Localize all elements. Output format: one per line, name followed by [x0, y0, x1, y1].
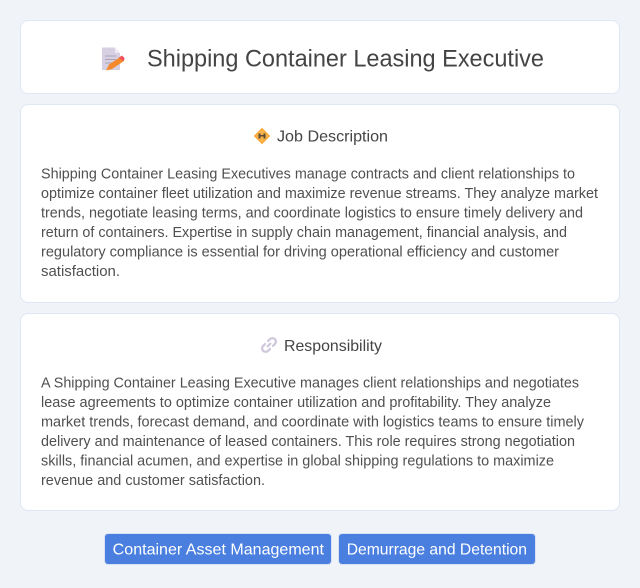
title text: Shipping Container Leasing Executive	[147, 46, 544, 72]
text block: job description: optimize container fleet utilization and maximize revenue streams. They analyze market	[41, 186, 598, 202]
panel: responsibility	[20, 313, 620, 511]
tag: demurrage and detention: Demurrage and Detention	[347, 542, 527, 558]
icon: chain link	[261, 337, 277, 353]
text block: job description: return of containers. Expertise in supply chain management, financial analysis, and	[41, 225, 567, 241]
text block: job description: satisfaction.	[41, 264, 120, 280]
text block: responsibility: A Shipping Container Leasing Executive manages client relationships and negotiates	[41, 376, 579, 392]
panel: title	[20, 20, 620, 94]
text block: responsibility: market trends, forecast demand, and coordinate with logistics teams to ensure timely	[41, 414, 585, 430]
text block: job description: trends, negotiate leasing terms, and coordinate logistics to ensure timely delivery and	[41, 206, 583, 222]
text block: responsibility: lease agreements to optimize container utilization and profitability. They analyze	[41, 395, 551, 411]
heading: responsibility: Responsibility	[284, 338, 382, 355]
text block: responsibility: revenue and customer satisfaction.	[41, 473, 265, 489]
text block: responsibility	[41, 376, 585, 489]
tag: demurrage and detention	[338, 533, 536, 565]
icon: document with pencil	[102, 48, 124, 70]
text block: job description	[41, 166, 598, 280]
icon: orange diamond	[254, 128, 270, 144]
tag: container asset management: Container Asset Management	[113, 542, 325, 558]
text block: responsibility: delivery and maintenance of leased containers. This role requires strong negotiation	[41, 434, 575, 450]
text block: job description: regulatory compliance is essential for driving operational efficiency and customer	[41, 244, 559, 260]
heading: job description: Job Description	[277, 128, 388, 146]
text block: job description: Shipping Container Leasing Executives manage contracts and client relationships to	[41, 166, 575, 182]
text block: responsibility: skills, financial acumen, and expertise in global shipping regulations to maximize	[41, 454, 554, 470]
panel: job description	[20, 104, 620, 303]
tag: container asset management	[104, 533, 332, 565]
